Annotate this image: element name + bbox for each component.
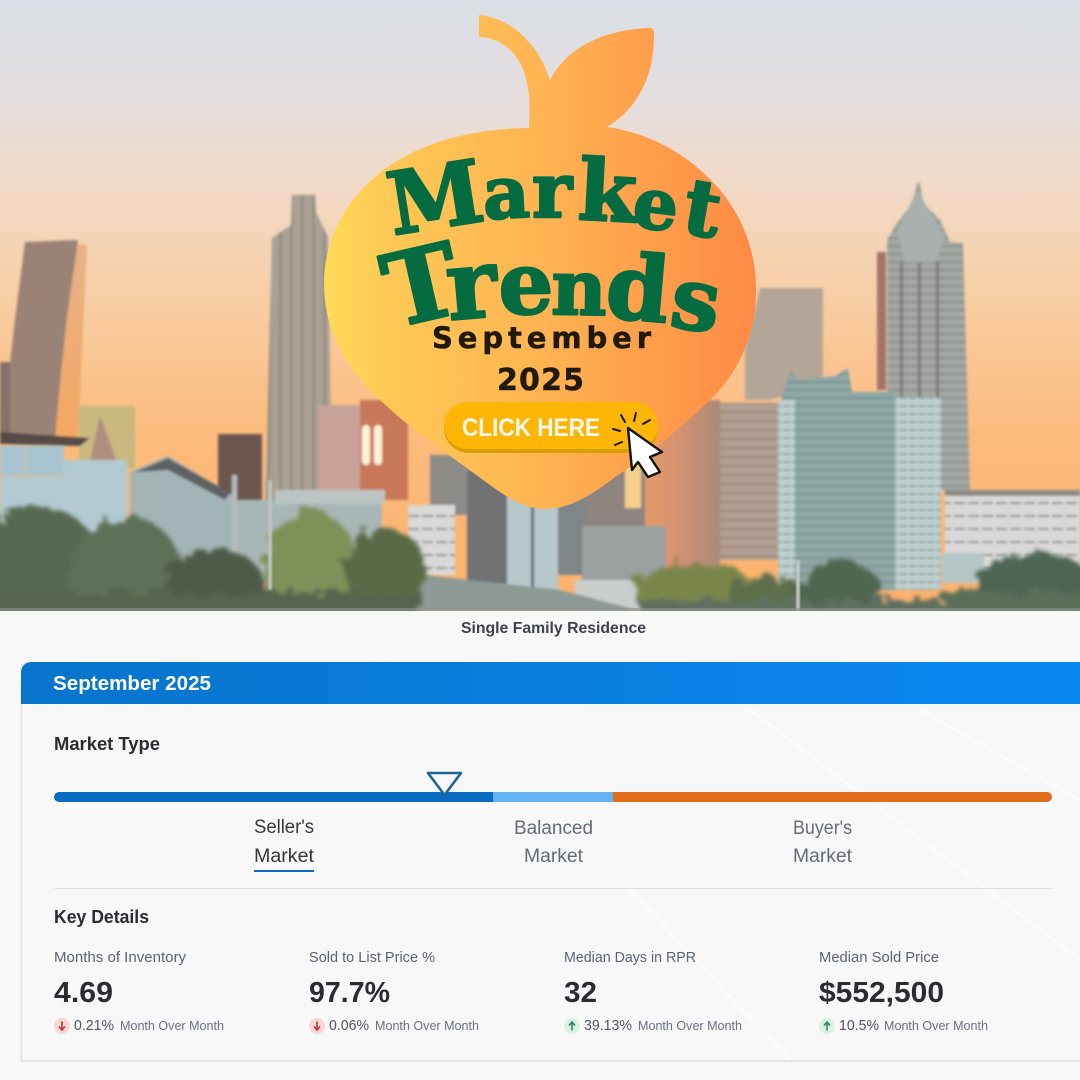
title: Market Trends: r	[532, 146, 573, 235]
title: Market Trends: a	[480, 149, 531, 236]
low-rise houses left	[0, 446, 25, 476]
peach badge	[324, 15, 756, 509]
stat: Sold to List Price: 0.06%	[329, 1017, 369, 1034]
stat: Months of Inventory: Month Over Month	[120, 1018, 224, 1033]
stat: Median Days in RPR: Month Over Month	[638, 1018, 742, 1033]
stat: Median Days in RPR: 32	[564, 977, 597, 1009]
skyline buildings	[0, 183, 1080, 610]
stat: Median Days in RPR	[564, 950, 742, 1034]
stat: Median Sold Price: Median Sold Price	[819, 950, 939, 966]
panel: statistics background	[0, 611, 1080, 1080]
stat: Median Days in RPR: Median Days in RPR	[564, 950, 696, 966]
icon: cursor with click rays	[613, 413, 662, 477]
label: Balanced Market: Market	[524, 846, 584, 867]
label: Buyer's Market	[793, 818, 853, 867]
marker triangle	[428, 773, 461, 795]
card header	[21, 662, 1080, 704]
card header: September 2025	[53, 672, 211, 695]
title: Market Trends	[372, 140, 728, 354]
title: Market Trends: n	[551, 243, 607, 333]
stat: Median Sold Price	[819, 950, 988, 1034]
subtitle: September 2025	[432, 321, 652, 398]
button: click here: CLICK HERE	[462, 414, 600, 442]
stat: Months of Inventory	[54, 950, 224, 1034]
subtitle: September 2025: 2025	[497, 363, 584, 398]
chart: market type slider	[54, 773, 1052, 802]
stat: Months of Inventory: Months of Inventory	[54, 950, 187, 966]
label: Seller's Market selected	[254, 817, 315, 872]
subtitle: September 2025: September	[432, 321, 652, 355]
panel: market card	[21, 662, 1080, 1061]
title: Market Trends: s	[665, 247, 727, 354]
title: Market Trends: T	[372, 220, 471, 351]
heading: Market Type: Market Type	[54, 734, 160, 754]
heading: Key Details: Key Details	[54, 907, 149, 927]
trees	[0, 502, 1080, 611]
text: Single Family Residence: Single Family Residence	[461, 620, 646, 637]
title: Market Trends: r	[441, 226, 503, 343]
stat: Months of Inventory: 4.69	[54, 977, 113, 1009]
title: Market Trends: t	[677, 161, 728, 257]
photo bottom edge	[0, 608, 1080, 611]
stat: Median Sold Price: $552,500	[819, 977, 944, 1009]
stat: Median Sold Price: 10.5%	[839, 1017, 879, 1034]
title: Market Trends: M	[380, 141, 490, 256]
button: click here	[444, 402, 658, 453]
title: Market Trends: e	[629, 160, 683, 248]
stat: Sold to List Price: 97.7%	[309, 977, 390, 1009]
label: Buyer's Market: Buyer's	[793, 818, 852, 839]
label: Seller's Market selected: Market	[254, 846, 315, 867]
stat: Median Sold Price: Month Over Month	[884, 1018, 988, 1033]
peach shape with stem and leaf	[324, 15, 756, 509]
stat: Sold to List Price	[309, 950, 479, 1034]
stat: Sold to List Price: Month Over Month	[375, 1018, 479, 1033]
title: Market Trends: e	[498, 233, 554, 335]
stat: Sold to List Price: Sold to List Price %	[309, 950, 435, 966]
title: Market Trends: k	[576, 140, 641, 242]
label: Buyer's Market: Market	[793, 846, 853, 867]
road	[400, 575, 640, 611]
label: Seller's Market selected: Seller's	[254, 817, 314, 838]
stat: Median Days in RPR: 39.13%	[584, 1017, 632, 1034]
title: Market Trends: d	[602, 233, 674, 344]
label: Balanced Market	[514, 818, 593, 867]
label: Balanced Market: Balanced	[514, 818, 593, 839]
photo: Atlanta skyline at sunset	[0, 0, 1080, 634]
stat: Months of Inventory: 0.21%	[74, 1017, 114, 1034]
